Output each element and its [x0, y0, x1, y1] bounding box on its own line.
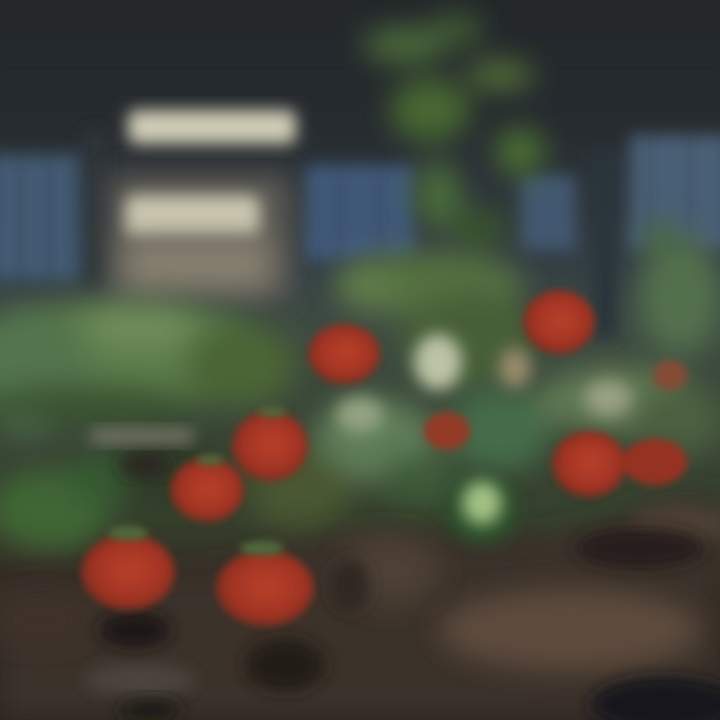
central and right foliage — [248, 366, 720, 530]
left lettuce bed — [0, 300, 295, 550]
green tomato — [446, 476, 518, 544]
ripe tomatoes — [81, 290, 687, 626]
tall tomato plant foliage — [335, 14, 720, 388]
white flowers and pale leaves — [336, 334, 632, 433]
tomato calyxes — [108, 407, 286, 555]
greenhouse windows — [0, 130, 720, 340]
window grid bars — [0, 60, 720, 280]
grow lights and light panel — [110, 110, 296, 300]
soil — [0, 428, 720, 720]
